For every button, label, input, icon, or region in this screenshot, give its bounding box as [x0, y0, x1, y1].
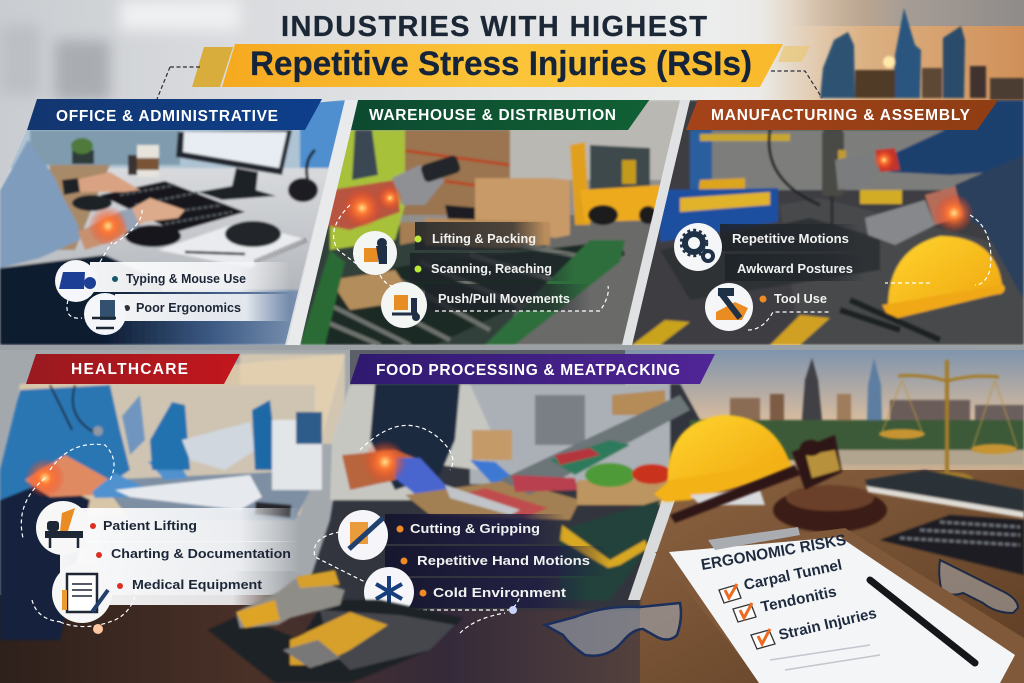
panel header: manufacturing: MANUFACTURING & ASSEMBLY [711, 107, 971, 124]
list: food risks [385, 514, 610, 608]
icon: clipboard [52, 563, 112, 623]
list: manufacturing risks: Tool Use [774, 291, 827, 306]
icon: lifting box [353, 231, 397, 275]
scales of justice [879, 360, 1017, 486]
safety glasses left [545, 603, 681, 656]
header background [0, 0, 1024, 345]
panel: warehouse and distribution [300, 99, 690, 345]
panel: food processing and meatpacking [300, 354, 715, 633]
work gloves on mat [208, 570, 463, 683]
title: INDUSTRIES WITH HIGHEST [281, 11, 707, 43]
list: warehouse risks: Scanning, Reaching [431, 261, 552, 276]
list: healthcare risks: Patient Lifting [103, 518, 197, 533]
city skyline: top right [760, 0, 1024, 101]
icon: keyboard [55, 260, 97, 302]
panel header: warehouse: WAREHOUSE & DISTRIBUTION [369, 107, 616, 124]
panel header: healthcare: HEALTHCARE [71, 361, 188, 378]
bottom row background [0, 350, 1024, 683]
pen [870, 580, 975, 663]
gavel [670, 435, 887, 532]
list: office risks [90, 262, 290, 321]
icon: patient bed [36, 501, 90, 555]
panel: healthcare [0, 354, 345, 640]
hard hat on desk [654, 415, 792, 505]
panel: manufacturing and assembly [630, 99, 1024, 345]
panel header: office: OFFICE & ADMINISTRATIVE [56, 108, 278, 125]
checkbox: carpal tunnel [719, 584, 741, 603]
clipboard: ergonomic risks [655, 527, 1024, 683]
list: healthcare risks: Medical Equipment [132, 577, 263, 592]
book and keyboard [865, 470, 1024, 575]
list: healthcare risks: Charting & Documentation [111, 546, 291, 561]
list: office risks: Poor Ergonomics [136, 300, 241, 315]
icon: knife [338, 510, 388, 560]
title banner [157, 44, 822, 99]
icon: gears [674, 223, 722, 271]
list: office risks: Typing & Mouse Use [126, 271, 246, 286]
panel header: warehouse [348, 99, 650, 130]
panel header: manufacturing [686, 99, 999, 130]
panel header: healthcare [26, 354, 240, 384]
list: food risks: Cold Environment [433, 585, 567, 600]
safety glasses right [939, 560, 1018, 613]
divider strip between food and desk [628, 500, 675, 600]
checkbox: strain injuries [751, 629, 775, 649]
list: warehouse risks: Push/Pull Movements [438, 291, 570, 306]
list: food risks: Repetitive Hand Motions [417, 553, 590, 568]
icon: snowflake [364, 567, 414, 617]
icon: wrench [705, 283, 753, 331]
list: manufacturing risks [720, 224, 854, 303]
list: healthcare risks [60, 508, 300, 605]
icon: cart [381, 282, 427, 328]
panel header: office [27, 99, 322, 130]
list: manufacturing risks: Awkward Postures [737, 261, 853, 276]
icon: chair and monitor [84, 293, 126, 335]
checkbox: tendonitis [733, 603, 756, 622]
clipboard: ergonomic risks: Strain Injuries [777, 605, 878, 644]
list: warehouse risks [410, 222, 590, 311]
panel: office and administrative [0, 99, 350, 345]
office scene [0, 100, 350, 345]
clipboard: ergonomic risks: Carpal Tunnel [742, 556, 844, 594]
healthcare scene [0, 354, 345, 640]
skyline: bottom right [690, 358, 1024, 465]
food scene [300, 384, 700, 610]
clipboard: ergonomic risks: ERGONOMIC RISKS [700, 532, 847, 574]
clipboard: ergonomic risks: Tendonitis [759, 583, 838, 616]
list: warehouse risks: Lifting & Packing [432, 231, 536, 246]
warehouse scene [300, 100, 690, 345]
list: food risks: Cutting & Gripping [410, 521, 540, 536]
list: manufacturing risks: Repetitive Motions [732, 231, 849, 246]
manufacturing scene [630, 100, 1024, 345]
title banner: Repetitive Stress Injuries (RSIs) [250, 45, 752, 83]
panel header: food: FOOD PROCESSING & MEATPACKING [376, 362, 680, 379]
panel header: food [350, 354, 715, 384]
white divider strips between panels [0, 100, 1024, 353]
